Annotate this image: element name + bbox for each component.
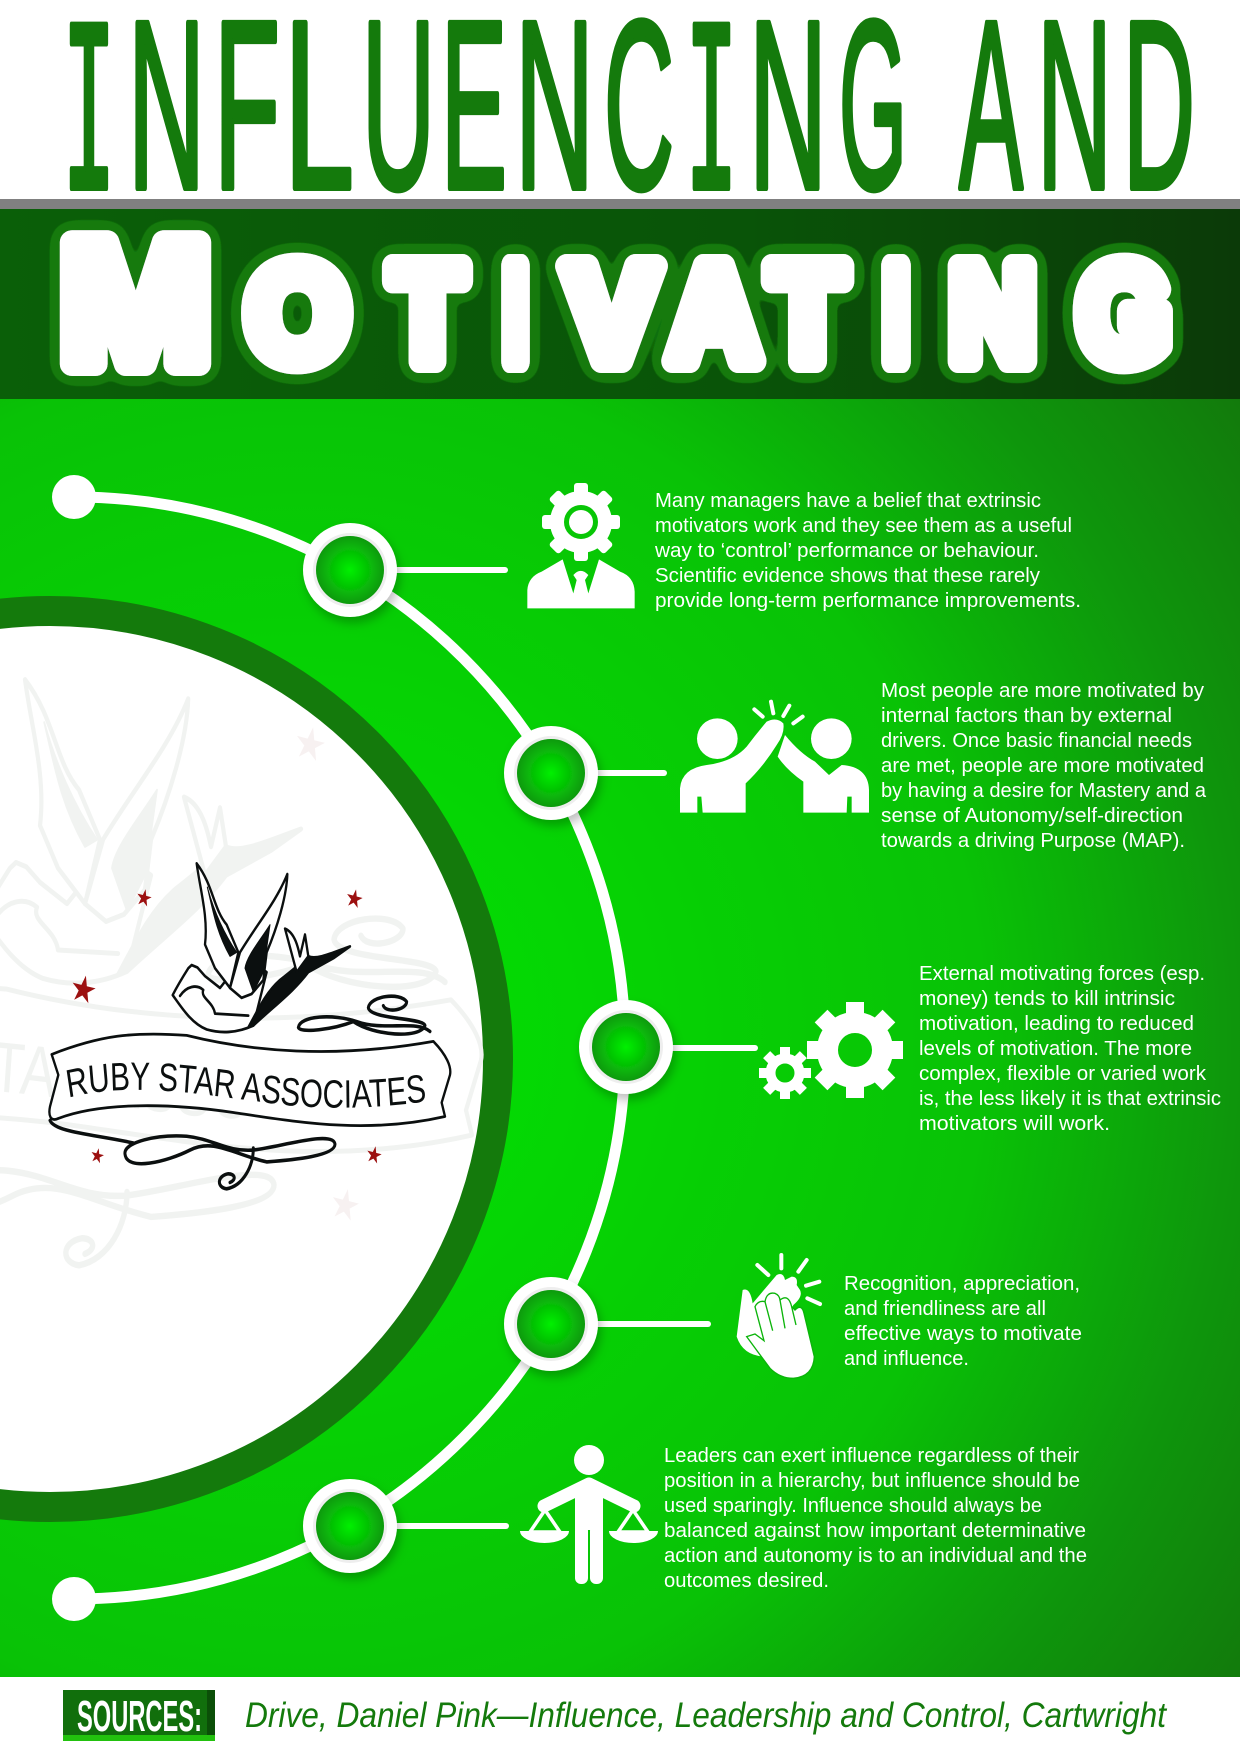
title band background	[0, 209, 1240, 399]
icon: clapping hands	[737, 1255, 820, 1378]
sources text: Drive, Daniel Pink—Influence, Leadership and Control, Cartwright	[245, 1696, 1167, 1735]
text: block 3: External motivating forces (esp.	[919, 962, 1205, 985]
text: block 2: internal factors than by external	[881, 704, 1172, 727]
title: Motivating: M	[60, 204, 211, 402]
node 1	[303, 523, 397, 617]
text: block 5: outcomes desired.	[664, 1569, 829, 1592]
text: block 2: towards a driving Purpose (MAP).	[881, 829, 1185, 852]
timeline end dots	[52, 475, 96, 1621]
connector lines	[390, 570, 755, 1526]
title: Motivating	[60, 204, 1170, 402]
text: block 1: provide long-term performance improvements.	[655, 589, 1081, 612]
ghost stars	[294, 724, 361, 1222]
text: block 2	[881, 679, 1207, 852]
text: block 5: used sparingly. Influence should always be	[664, 1494, 1042, 1517]
sources badge: SOURCES:	[77, 1692, 202, 1741]
title: Motivating: G	[1078, 237, 1170, 391]
red stars	[70, 887, 383, 1164]
text: block 3: levels of motivation. The more	[919, 1037, 1192, 1060]
text: block 3: money) tends to kill intrinsic	[919, 987, 1175, 1010]
text: block 5	[664, 1444, 1087, 1592]
title: Motivating: N	[950, 237, 1035, 391]
logo: Ruby Star Associates	[0, 677, 484, 1268]
text: block 5: position in a hierarchy, but influence should be	[664, 1469, 1080, 1492]
node 4	[504, 1277, 598, 1371]
node 3	[579, 1000, 673, 1094]
text: block 4: and friendliness are all	[844, 1297, 1046, 1320]
text: block 5: Leaders can exert influence regardless of their	[664, 1444, 1079, 1467]
text: block 2: drivers. Once basic financial needs	[881, 729, 1192, 752]
node 2	[504, 726, 598, 820]
timeline arc	[74, 497, 625, 1599]
text: block 1: Many managers have a belief that extrinsic	[655, 489, 1041, 512]
title: Motivating: I	[883, 237, 909, 391]
ghost watermark	[0, 677, 484, 1268]
text: block 4: effective ways to motivate	[844, 1322, 1082, 1345]
title: Motivating: V	[566, 237, 657, 391]
text: block 3: motivation, leading to reduced	[919, 1012, 1194, 1035]
text: block 2: Most people are more motivated by	[881, 679, 1205, 702]
divider bar	[0, 199, 1240, 209]
white logo circle with dark ring	[0, 611, 498, 1507]
title: Motivating: O	[247, 237, 348, 391]
text: block 1: motivators work and they see them as a useful	[655, 514, 1072, 537]
title: Motivating: A	[669, 237, 759, 391]
text: block 1	[654, 489, 1081, 612]
icon: person with balance scales	[520, 1445, 658, 1584]
title: Influencing and	[62, 0, 1195, 263]
text: block 3: motivators will work.	[919, 1112, 1110, 1135]
icon: high five	[680, 702, 869, 813]
title: Motivating: T	[391, 237, 464, 391]
sources badge	[63, 1690, 215, 1741]
banner text: RUBY STAR ASSOCIATES	[66, 1062, 425, 1108]
text: block 4	[844, 1272, 1082, 1370]
text: block 2: by having a desire for Mastery and a	[881, 779, 1207, 802]
text: block 4: Recognition, appreciation,	[844, 1272, 1080, 1295]
text: block 1: way to ‘control’ performance or behaviour.	[654, 539, 1039, 562]
text: block 5: action and autonomy is to an individual and the	[664, 1544, 1087, 1567]
title: Motivating: T	[770, 237, 845, 391]
icon: gears	[759, 1002, 903, 1099]
text: block 2: are met, people are more motivated	[881, 754, 1204, 777]
text: block 1: Scientific evidence shows that these rarely	[655, 564, 1041, 587]
text: block 5: balanced against how important determinative	[664, 1519, 1086, 1542]
text: block 3	[919, 962, 1221, 1135]
node 5	[303, 1479, 397, 1573]
text: block 2: sense of Autonomy/self-direction	[881, 804, 1183, 827]
text: block 3: is, the less likely it is that extrinsic	[919, 1087, 1221, 1110]
title: Motivating: I	[503, 237, 528, 391]
bird and banner	[49, 863, 450, 1189]
text: block 3: complex, flexible or varied work	[919, 1062, 1207, 1085]
text: block 4: and influence.	[844, 1347, 969, 1370]
icon: manager with gear head	[527, 483, 635, 608]
green gradient panel	[0, 399, 1240, 1677]
